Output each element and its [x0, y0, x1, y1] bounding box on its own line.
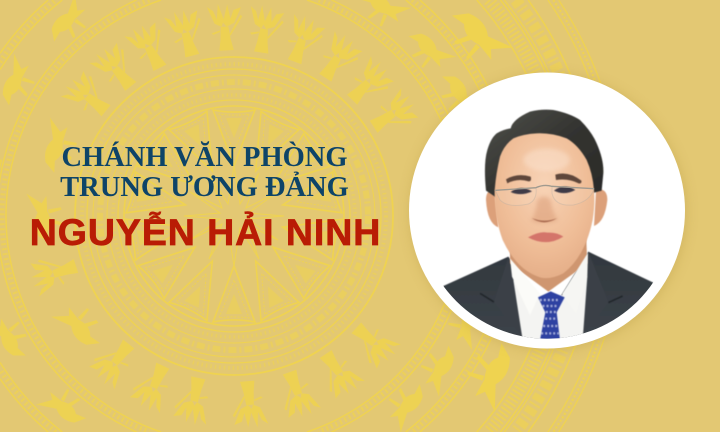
mouth — [528, 232, 563, 242]
neck — [510, 233, 587, 292]
eyes — [511, 186, 575, 194]
large motifs ring — [441, 0, 528, 412]
nose base — [532, 218, 557, 222]
shirt — [510, 253, 588, 340]
necktie — [538, 291, 565, 340]
hair — [485, 110, 603, 200]
subtitle line 2: TRUNG ƯƠNG ĐẢNG — [60, 172, 349, 203]
ears — [486, 190, 498, 227]
figures ring — [26, 3, 422, 429]
nose — [531, 197, 558, 223]
white circle — [409, 72, 685, 348]
star rays — [126, 110, 342, 322]
glasses — [495, 185, 594, 205]
eyebrows — [506, 174, 581, 183]
inner meander band — [75, 57, 393, 375]
face — [495, 133, 594, 278]
animals ring — [0, 0, 492, 432]
portrait circle with photo — [408, 72, 688, 352]
portrait of man in suit — [443, 108, 654, 339]
suit jacket — [443, 251, 654, 339]
circle shadow — [410, 74, 686, 350]
subtitle line 1: CHÁNH VĂN PHÒNG — [61, 142, 348, 173]
forehead highlight — [523, 149, 570, 171]
name: NGUYỄN HẢI NINH — [30, 211, 381, 253]
center star — [184, 166, 284, 266]
